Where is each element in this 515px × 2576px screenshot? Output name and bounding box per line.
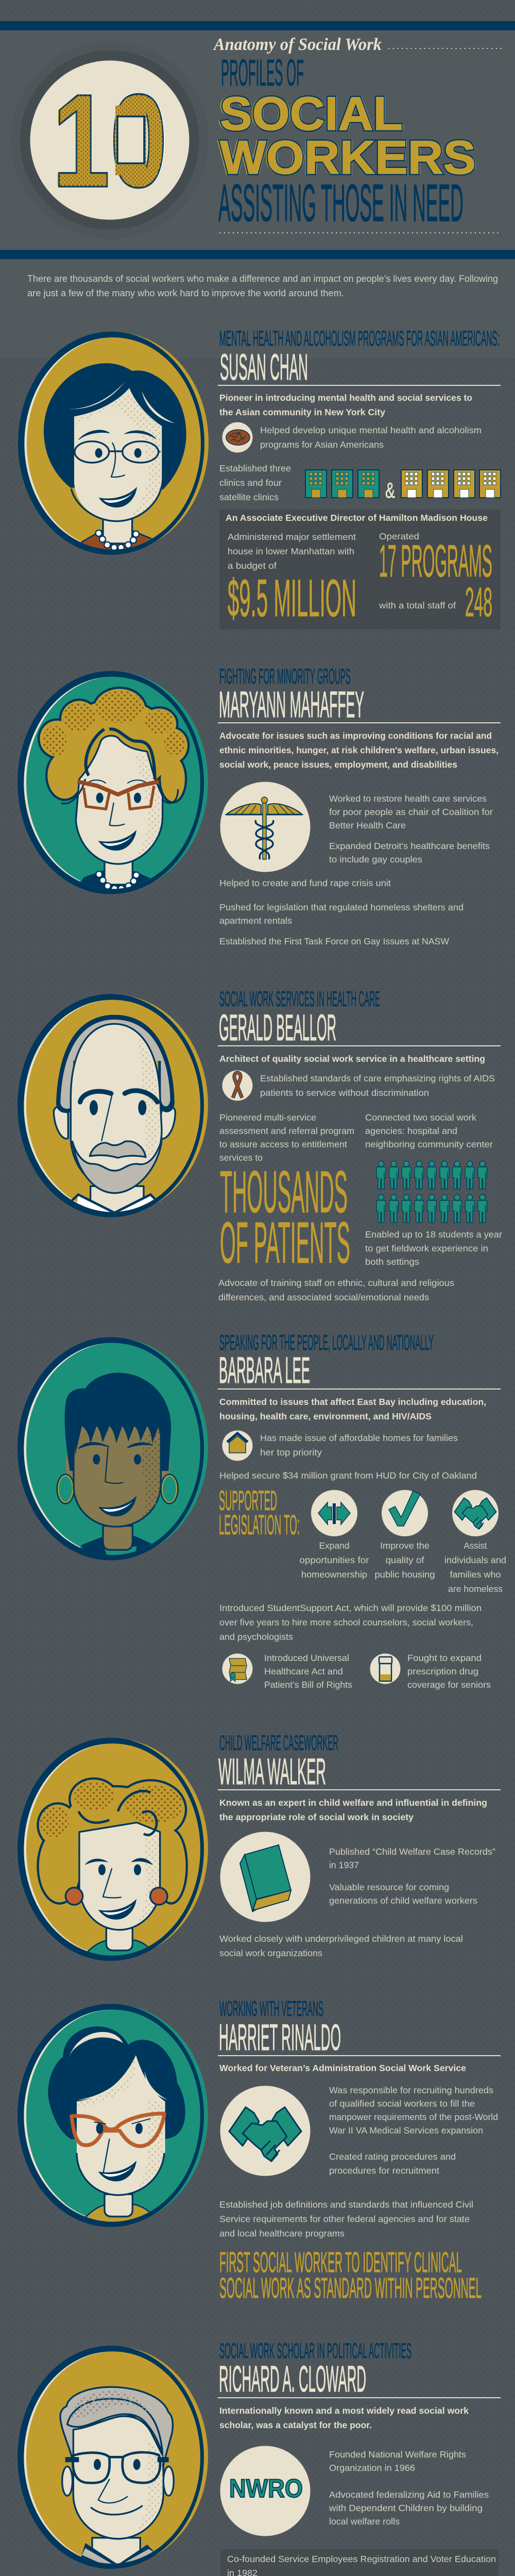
- callout: Hamilton Madison House: An Associate Executive Director of Hamilton Madison House: [226, 513, 488, 523]
- text: thousands of patients: assessment and referral program: [219, 1126, 354, 1136]
- callout: Hamilton Madison House: Administered major settlement: [228, 532, 356, 542]
- lead text: [219, 1798, 487, 1822]
- text: two agencies: Connected two social work: [365, 1112, 476, 1123]
- lead text: Known as an expert in child welfare and influential in defining: [219, 1798, 487, 1808]
- text: case records: Published “Child Welfare Case Records”: [329, 1846, 495, 1857]
- text: thousands of patients: Pioneered multi-service: [219, 1112, 316, 1123]
- lead text: [219, 2405, 469, 2430]
- text: homes: [219, 1433, 477, 1481]
- panel: Barbara Lee: LEGISLATION TO:: [219, 1510, 300, 1540]
- text: homes: Helped secure $34 million grant from HUD for City of Oakland: [219, 1470, 477, 1481]
- icons: clinics and satellite clinics: &: [385, 478, 395, 502]
- callout: Hamilton Madison House: a budget of: [228, 561, 277, 571]
- text: case records: [329, 1846, 495, 1906]
- text: two agencies: neighboring community center: [365, 1139, 493, 1149]
- text: AIDS: [260, 1073, 495, 1098]
- text: recruiting: Was responsible for recruiting hundreds: [329, 2085, 493, 2095]
- lead text: [219, 731, 499, 770]
- text: achievements: apartment rentals: [219, 916, 292, 926]
- icon: check mark: [382, 1490, 428, 1536]
- text: universal healthcare: Patient’s Bill of Rights: [264, 1680, 352, 1690]
- heading: social workers: [218, 88, 477, 184]
- text: brain: Helped develop unique mental health and alcoholism: [260, 425, 482, 435]
- text: assist homeless: individuals and: [444, 1555, 506, 1565]
- text: thousands of patients: [219, 1112, 354, 1275]
- panel: Barbara Lee: BARBARA LEE: [219, 1350, 310, 1391]
- callout: Hamilton Madison House: with a total staff of: [379, 600, 456, 611]
- lead text: social work, peace issues, employment, and disabilities: [219, 759, 457, 770]
- text: improve housing: Improve the: [380, 1540, 430, 1551]
- lead text: Advocate for issues such as improving conditions for racial and: [219, 731, 492, 741]
- text: health care: for poor people as chair of Coalition for: [329, 807, 493, 817]
- text: two agencies: agencies: hospital and: [365, 1126, 457, 1136]
- callout: voter education: [220, 2549, 499, 2576]
- portrait: Gerald Beallor: [18, 994, 208, 1221]
- icons: clinics and satellite clinics: [305, 470, 501, 502]
- text: StudentSupport Act: [219, 1603, 482, 1642]
- icon: caduceus: [220, 782, 310, 872]
- panel: Barbara Lee: SUPPORTED: [219, 1485, 277, 1516]
- panel: Harriet Rinaldo: WORKING WITH VETERANS: [219, 1996, 323, 2021]
- panel: Gerald Beallor: [18, 987, 502, 1302]
- text: StudentSupport Act: and psychologists: [219, 1632, 293, 1642]
- portrait: Maryann Mahaffey: [18, 671, 208, 894]
- callout: Hamilton Madison House: house in lower Manhattan with: [228, 546, 354, 556]
- text: improve housing: [375, 1540, 435, 1580]
- callout: Hamilton Madison House: [219, 510, 501, 630]
- icon: handshake: [452, 1490, 499, 1536]
- heading: supported legislation: [219, 1485, 300, 1540]
- text: thousands of patients: services to: [219, 1153, 263, 1163]
- badge: number 10: [11, 41, 209, 239]
- icon: house: [222, 1430, 252, 1461]
- lead text: the Asian community in New York City: [219, 407, 385, 417]
- text: expand opportunities: homeownership: [301, 1569, 367, 1580]
- text: recruiting: Created rating procedures and: [329, 2151, 456, 2162]
- icon: NWRO badge: NWRO: [229, 2474, 303, 2503]
- lead text: Internationally known and a most widely read social work: [219, 2405, 469, 2416]
- text: students: to get fieldwork experience in: [365, 1243, 488, 1253]
- text: recruiting: [329, 2085, 498, 2176]
- portrait: Susan Chan: [18, 332, 209, 555]
- text: training: [218, 1278, 454, 1302]
- icon: book: [220, 1832, 310, 1922]
- text: job definitions: and local healthcare programs: [219, 2228, 345, 2239]
- text: health care: Better Health Care: [329, 820, 406, 831]
- text: improve housing: quality of: [385, 1555, 424, 1565]
- text: recruiting: War II VA Medical Services expansion: [329, 2125, 483, 2136]
- panel: Wilma Walker: WILMA WALKER: [218, 1752, 326, 1792]
- text: underprivileged children: [219, 1934, 463, 1958]
- text: students: [365, 1229, 502, 1267]
- icon: ribbon: [222, 1071, 252, 1100]
- text: training: differences, and associated social/emotional needs: [218, 1292, 429, 1302]
- panel: Maryann Mahaffey: [18, 664, 501, 946]
- text: universal healthcare: Introduced Universal: [264, 1653, 349, 1663]
- text: expand opportunities: opportunities for: [300, 1555, 369, 1565]
- text: recruiting: manpower requirements of the post-World: [329, 2112, 498, 2122]
- heading: social workers: SOCIAL: [218, 88, 403, 140]
- icon: pill bottle: [370, 1654, 401, 1684]
- text: health care: Worked to restore health care services: [329, 793, 487, 804]
- text: expand opportunities: Expand: [319, 1540, 349, 1551]
- text: clinics: [219, 463, 291, 502]
- text: brain: programs for Asian Americans: [260, 439, 384, 450]
- text: assist homeless: [444, 1540, 506, 1594]
- title banner: [0, 21, 515, 259]
- text: job definitions: Service requirements for other federal agencies and for state: [219, 2214, 470, 2224]
- title banner: PROFILES OF: [221, 53, 304, 94]
- portrait: Wilma Walker: [18, 1738, 208, 1961]
- text: universal healthcare: [264, 1653, 352, 1690]
- panel: Susan Chan: [18, 326, 501, 630]
- heading: social workers: SOCIAL: [220, 88, 403, 140]
- text: job definitions: Established job definitions and standards that influenced Civil: [219, 2199, 473, 2210]
- text: welfare rights: local welfare rolls: [329, 2516, 400, 2527]
- lead text: housing, health care, environment, and HIV/AIDS: [219, 1411, 432, 1421]
- portrait: Richard A. Cloward: [18, 2346, 208, 2570]
- lead text: the appropriate role of social work in society: [219, 1812, 414, 1822]
- callout: first social worker: [219, 2246, 482, 2304]
- text: recruiting: procedures for recruitment: [329, 2165, 439, 2176]
- icon: handshake: [220, 2086, 310, 2176]
- icon: certificate: [222, 1654, 252, 1684]
- text: clinics: clinics and four: [219, 478, 282, 488]
- text: welfare rights: Founded National Welfare Rights: [329, 2449, 466, 2460]
- text: brain: [260, 425, 482, 450]
- text: prescription drugs: coverage for seniors: [407, 1680, 491, 1690]
- text: AIDS: patients to service without discrimination: [260, 1088, 429, 1098]
- text: homes: her top priority: [260, 1447, 322, 1458]
- text: achievements: Helped to create and fund rape crisis unit: [219, 878, 391, 888]
- text: thousands of patients: to assure access to entitlement: [219, 1139, 347, 1149]
- text: assist homeless: Assist: [464, 1540, 487, 1551]
- portrait: Harriet Rinaldo: [18, 2004, 208, 2227]
- badge: number 10: 10: [53, 67, 167, 215]
- heading: social workers: SOCIAL: [220, 88, 403, 140]
- text: welfare rights: Advocated federalizing Aid to Families: [329, 2489, 489, 2500]
- text: recruiting: of qualified social workers to fill the: [329, 2098, 475, 2109]
- lead text: ethnic minorities, hunger, at risk children's welfare, urban issues,: [219, 745, 499, 755]
- text: StudentSupport Act: over five years to hire more school counselors, social workers,: [219, 1617, 473, 1628]
- text: welfare rights: [329, 2449, 489, 2527]
- badge: number 10: 10: [53, 67, 169, 215]
- text: prescription drugs: [407, 1653, 491, 1690]
- lead text: [219, 1397, 486, 1421]
- lead text: Worked for Veteran’s Administration Social Work Service: [219, 2063, 466, 2073]
- text: underprivileged children: Worked closely with underprivileged children at many local: [219, 1934, 463, 1944]
- text: AIDS: Established standards of care emphasizing rights of AIDS: [260, 1073, 495, 1083]
- text: achievements: Established the First Task Force on Gay Issues at NASW: [219, 936, 449, 946]
- text: expand opportunities: [300, 1540, 369, 1580]
- text: StudentSupport Act: Introduced StudentSupport Act, which will provide $100 million: [219, 1603, 482, 1613]
- portrait: Barbara Lee: [18, 1337, 208, 1562]
- text: health care: [329, 793, 493, 865]
- text: case records: Valuable resource for coming: [329, 1882, 449, 1892]
- lead text: [219, 393, 472, 417]
- heading: social workers: WORKERS: [220, 131, 476, 184]
- heading: social workers: SOCIAL: [221, 88, 404, 140]
- icon: expand opportunities: [311, 1490, 357, 1536]
- panel: Susan Chan: SUSAN CHAN: [220, 347, 308, 388]
- lead text: Pioneer in introducing mental health and social services to: [219, 393, 472, 403]
- text: welfare rights: Organization in 1966: [329, 2463, 415, 2473]
- text: prescription drugs: prescription drug: [407, 1666, 478, 1676]
- text: assist homeless: families who: [450, 1569, 501, 1580]
- panel: Harriet Rinaldo: [18, 1996, 501, 2304]
- badge: number 10: 10: [51, 67, 167, 215]
- icon: NWRO badge: [220, 2446, 310, 2536]
- text: students: both settings: [365, 1257, 419, 1267]
- panel: Wilma Walker: [18, 1731, 501, 1961]
- heading: social workers: WORKERS: [221, 131, 477, 184]
- text: health care: Expanded Detroit's healthcare benefits: [329, 841, 490, 851]
- heading: social workers: WORKERS: [218, 131, 476, 184]
- text: case records: generations of child welfare workers: [329, 1895, 477, 1906]
- text: universal healthcare: Healthcare Act and: [264, 1666, 343, 1676]
- lead text: scholar, was a catalyst for the poor.: [219, 2420, 372, 2430]
- text: health care: to include gay couples: [329, 854, 422, 865]
- icon: people rows: [376, 1161, 487, 1223]
- text: students: Enabled up to 18 students a year: [365, 1229, 502, 1240]
- tagline: Anatomy of Social Work: Anatomy of Social Work: [213, 35, 382, 54]
- panel: Richard A. Cloward: [18, 2338, 501, 2576]
- panel: Barbara Lee: [18, 1330, 506, 1690]
- lead text: Architect of quality social work service in a healthcare setting: [219, 1054, 485, 1064]
- intro text: are just a few of the many who work hard to improve the world around them.: [27, 287, 344, 298]
- intro text: There are thousands of social workers who make a difference and an impact on people’s lives every day. Following: [27, 273, 498, 284]
- text: achievements: Pushed for legislation that regulated homeless shelters and: [219, 902, 464, 912]
- callout: Hamilton Madison House: Operated: [379, 531, 419, 541]
- text: underprivileged children: social work organizations: [219, 1948, 322, 1958]
- text: clinics: satellite clinics: [219, 492, 279, 502]
- lead text: Committed to issues that affect East Bay including education,: [219, 1397, 486, 1407]
- text: achievements: [219, 878, 464, 946]
- text: clinics: Established three: [219, 463, 291, 473]
- icon: brain: [222, 422, 252, 452]
- heading: social workers: WORKERS: [220, 131, 476, 184]
- text: two agencies: [365, 1112, 493, 1149]
- text: training: Advocate of training staff on ethnic, cultural and religious: [218, 1278, 454, 1288]
- text: homes: Has made issue of affordable homes for families: [260, 1433, 458, 1443]
- text: prescription drugs: Fought to expand: [407, 1653, 482, 1663]
- text: assist homeless: are homeless: [448, 1584, 503, 1594]
- intro text: [27, 273, 498, 298]
- text: case records: in 1937: [329, 1860, 359, 1870]
- badge: number 10: 10: [53, 67, 167, 215]
- text: job definitions: [219, 2199, 473, 2239]
- text: welfare rights: with Dependent Children by building: [329, 2503, 483, 2513]
- text: improve housing: public housing: [375, 1569, 435, 1580]
- callout: voter education: Co-founded Service Employees Registration and Voter Education: [227, 2554, 496, 2564]
